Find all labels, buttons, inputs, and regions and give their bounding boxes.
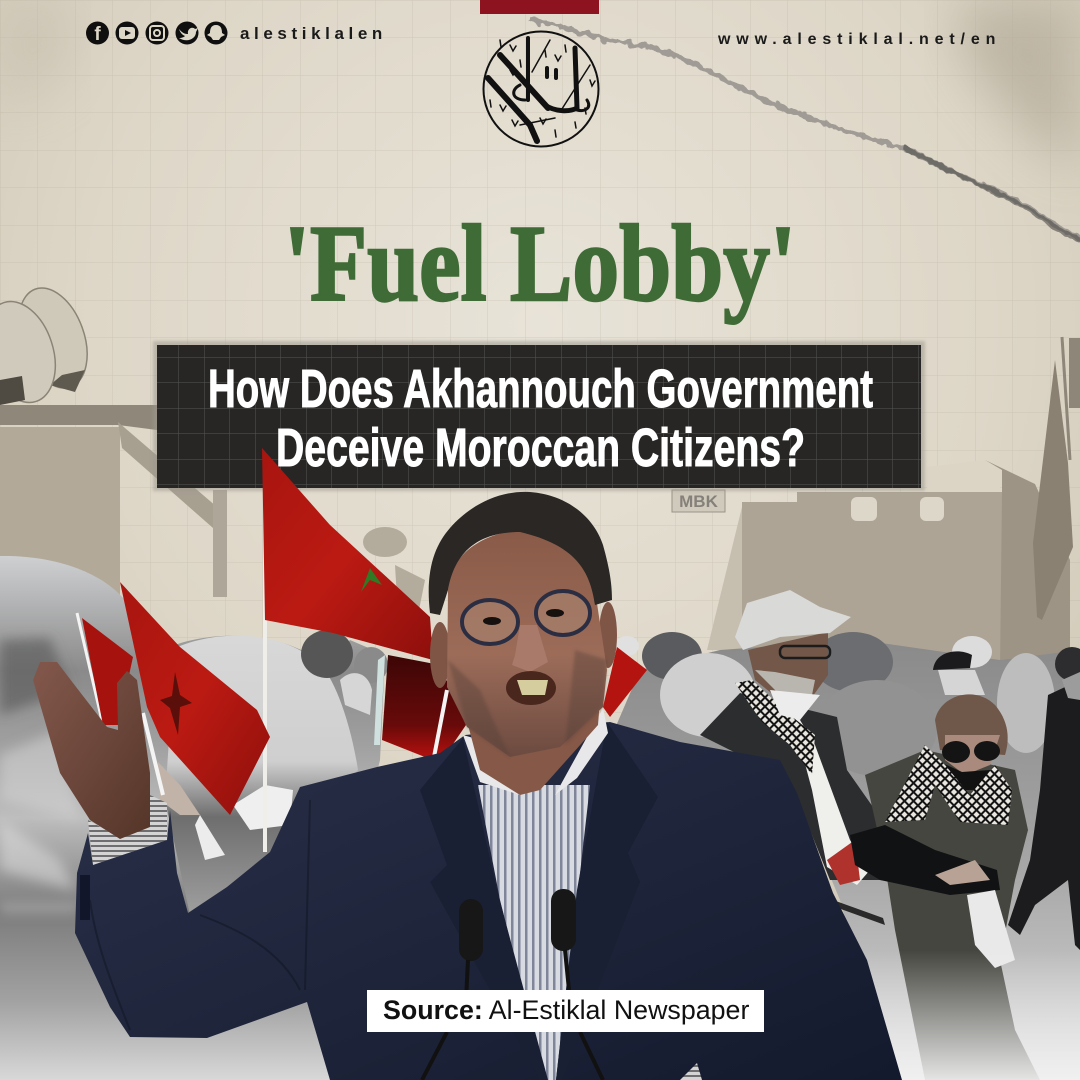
protester woman [850,694,1040,1080]
ears [430,602,617,688]
police shields [660,653,1055,776]
icon: youtube [116,22,138,44]
icon: twitter [176,22,198,44]
icon: instagram [146,22,168,44]
nose [512,625,548,672]
microphone left [422,899,483,1080]
helmets [615,632,893,692]
hair [429,492,612,615]
speaker [75,492,902,1080]
headline panel [153,341,925,491]
suit [75,722,902,1080]
website url: www.alestiklal.net/en [717,31,1001,48]
crowd left [0,556,388,1080]
spectacles [780,646,830,658]
face [447,530,607,757]
beard [755,670,815,700]
neck [468,700,600,795]
building right [672,460,1070,680]
glasses [462,591,590,644]
MBK sign [672,490,725,512]
satellite dishes [0,279,100,412]
lapels [420,722,658,1080]
far left flag [77,613,133,725]
collar [463,708,608,795]
cap [735,590,851,650]
face [945,735,1000,775]
top red tab [480,0,599,14]
small dish and tower behind flag [363,527,425,615]
protester with cap [700,590,940,885]
scarf end [967,890,1015,968]
shield reflections [0,638,80,912]
curb [833,900,885,925]
icon: facebook [86,22,109,45]
headline panel: Deceive Moroccan Citizens? [276,418,805,478]
wall ornaments [851,497,944,521]
torn paper crack [528,18,1080,240]
microphone right [551,889,603,1080]
left flag with star [120,582,270,815]
teeth [517,680,548,695]
face [748,632,828,700]
hand in the crowd [158,762,200,815]
policeman with cap [933,636,992,695]
crowd right [610,632,1080,1080]
mask [770,690,820,720]
shield [165,636,358,915]
scarf [735,683,870,885]
centre flag [374,655,466,763]
right cuff [680,1063,702,1080]
linked arms [850,825,1000,895]
cuff [88,795,167,865]
right flag [603,647,647,717]
logo emblem [484,32,598,146]
mouth [506,671,556,705]
coat [865,750,1040,1080]
hair [935,694,1008,755]
white fog at the bottom right [830,950,1080,1080]
shirt [478,785,590,1080]
policeman right [1008,647,1080,950]
social handle: alestiklalen [240,24,387,43]
social icons [86,22,228,45]
title: 'Fuel Lobby' [284,203,796,324]
sunglasses [942,741,1000,763]
jacket [700,693,940,885]
raised hand [33,662,150,839]
large flag with star [262,448,433,852]
flags [77,448,647,852]
source label [367,990,764,1032]
sleeve folds [90,800,310,1030]
sleeve buttons [80,875,90,920]
source label: Source: Al-Estiklal Newspaper [383,995,749,1025]
icon: facebook: f [94,24,101,45]
keffiyeh [885,745,1012,825]
building left [0,405,227,597]
dark flag on pole right [1033,337,1080,620]
MBK sign: MBK [679,492,719,511]
icon: snapchat [204,22,228,44]
cheek stubble [448,650,607,757]
black mask [940,762,995,790]
hand and cuff [33,662,167,865]
eyes [483,609,564,625]
